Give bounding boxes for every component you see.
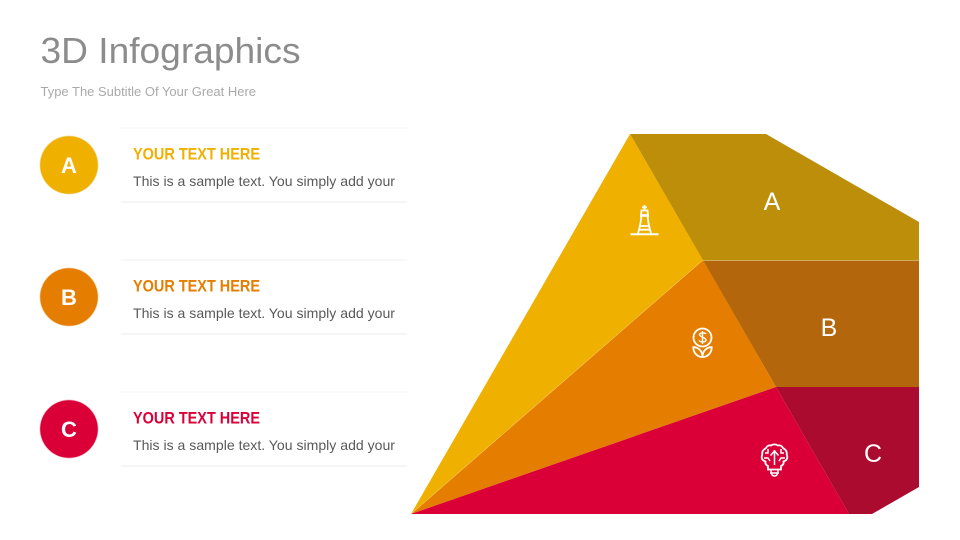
- item A: [40, 128, 407, 202]
- icon: money flower: [693, 328, 712, 357]
- heading C: YOUR TEXT HERE: [133, 410, 260, 428]
- heading B: YOUR TEXT HERE: [133, 278, 260, 296]
- front face red: [411, 387, 849, 514]
- body text C: This is a sample text. You simply add your: [133, 437, 395, 453]
- badge C: C: [61, 417, 77, 442]
- body text A: This is a sample text. You simply add your: [133, 173, 395, 189]
- icon: chess piece: [630, 205, 658, 234]
- face label A: A: [764, 188, 781, 216]
- icon: brain bulb: [762, 444, 787, 476]
- badge B: B: [61, 285, 77, 310]
- badge C: [40, 400, 98, 458]
- side face C: [776, 387, 919, 514]
- badge A: A: [61, 153, 77, 178]
- body text B: This is a sample text. You simply add your: [133, 305, 395, 321]
- 3D pyramid chart: [411, 134, 919, 514]
- item B: [40, 260, 407, 334]
- side face A: [630, 134, 919, 260]
- badge B: [40, 268, 98, 326]
- side face B: [703, 260, 919, 387]
- item C: [40, 392, 407, 466]
- front face yellow: [411, 134, 703, 514]
- title: 3D Infographics: [40, 30, 300, 71]
- face label C: C: [864, 440, 882, 468]
- front face orange: [411, 260, 776, 514]
- badge A: [40, 136, 98, 194]
- heading A: YOUR TEXT HERE: [133, 146, 260, 164]
- face label B: B: [821, 314, 837, 342]
- subtitle: Type The Subtitle Of Your Great Here: [40, 85, 256, 99]
